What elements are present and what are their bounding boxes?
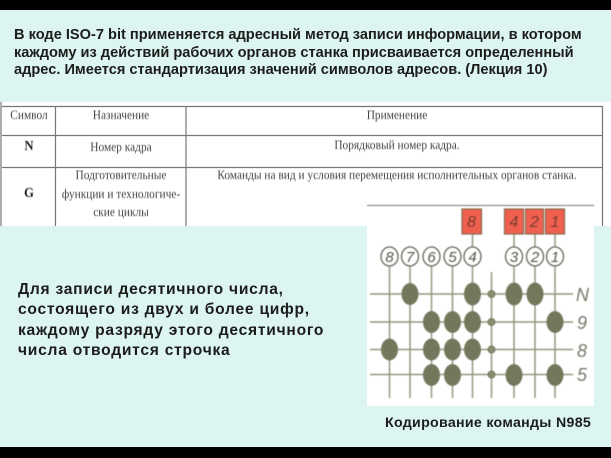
table panel: функции и технологиче- bbox=[62, 187, 180, 201]
table panel: Порядковый номер кадра. bbox=[334, 138, 459, 152]
table header bbox=[10, 108, 427, 122]
intro text: адрес. Имеется стандартизация значений символов адресов. (Лекция 10) bbox=[14, 62, 547, 78]
white area above the diagram bbox=[367, 206, 594, 406]
weight numbers: 4 bbox=[510, 214, 519, 231]
top rule bbox=[367, 204, 594, 206]
intro text: каждому из действий рабочих органов станка присваивается определенный bbox=[14, 45, 574, 61]
table panel: Номер кадра bbox=[90, 140, 152, 154]
track numbers: 1 bbox=[551, 249, 559, 266]
track numbers: 3 bbox=[510, 249, 519, 266]
track numbers: 5 bbox=[448, 249, 457, 266]
bottom black bar bbox=[0, 447, 611, 458]
top black bar bbox=[0, 0, 611, 10]
table panel: G bbox=[24, 186, 34, 201]
diagram caption: Кодирование команды N985 bbox=[385, 415, 591, 431]
table panel: Символ bbox=[10, 108, 48, 122]
row labels bbox=[576, 285, 590, 385]
row labels: N bbox=[576, 285, 590, 305]
weight numbers bbox=[467, 214, 559, 231]
row N bbox=[24, 138, 459, 154]
intro text: В коде ISO-7 bit применяется адресный метод записи информации, в котором bbox=[14, 27, 582, 43]
decimal number text: состоящего из двух и более цифр, bbox=[18, 301, 310, 318]
weight boxes bbox=[462, 209, 564, 234]
table panel: Подготовительные bbox=[76, 168, 166, 182]
row labels: 8 bbox=[577, 341, 587, 361]
track numbers: 4 bbox=[468, 249, 477, 266]
track numbers: 7 bbox=[406, 249, 415, 266]
decimal number text: Для записи десятичного числа, bbox=[18, 281, 284, 298]
table panel: ские циклы bbox=[93, 205, 149, 219]
tape lines bbox=[370, 234, 573, 398]
table panel: Применение bbox=[366, 108, 427, 122]
track numbers: 8 bbox=[385, 249, 394, 266]
track number circles bbox=[381, 247, 564, 266]
table panel: Команды на вид и условия перемещения исполнительных органов станка. bbox=[217, 168, 576, 182]
track numbers bbox=[385, 249, 559, 266]
track numbers: 6 bbox=[427, 249, 436, 266]
weight numbers: 1 bbox=[551, 214, 559, 231]
weight numbers: 8 bbox=[467, 214, 476, 231]
lower teal panel bbox=[0, 226, 611, 447]
table grid bbox=[0, 102, 604, 226]
row labels: 9 bbox=[577, 313, 587, 333]
sprocket holes bbox=[488, 290, 495, 378]
intro text bbox=[14, 27, 582, 78]
decimal number text bbox=[18, 281, 324, 359]
decimal number text: числа отводится строчка bbox=[18, 342, 230, 359]
decimal number text: каждому разряду этого десятичного bbox=[18, 322, 324, 339]
table panel bbox=[0, 102, 611, 226]
row labels: 5 bbox=[577, 365, 588, 385]
track numbers: 2 bbox=[530, 249, 540, 266]
weight numbers: 2 bbox=[529, 214, 539, 231]
bit holes bbox=[381, 282, 564, 386]
table panel: N bbox=[24, 139, 34, 154]
row G bbox=[24, 168, 576, 220]
table panel: Назначение bbox=[93, 108, 149, 122]
